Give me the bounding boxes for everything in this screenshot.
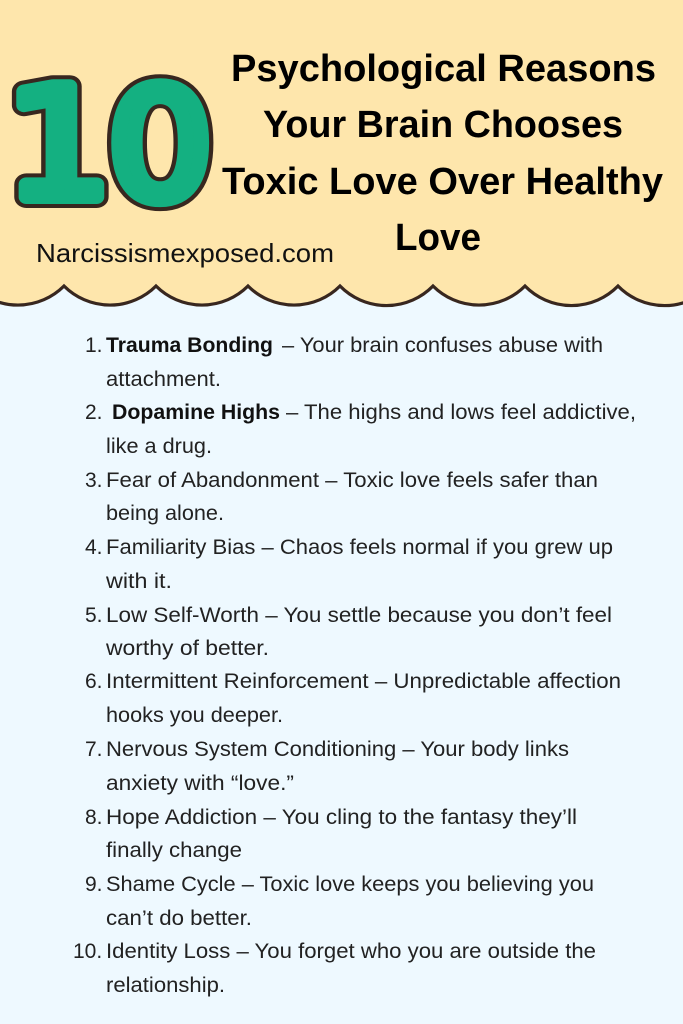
item 6: intermittent reinforcement: hooks you deeper. xyxy=(106,704,283,727)
item 5: low self-worth: worthy of better. xyxy=(105,637,269,660)
item 10: identity loss: Identity Loss – You forget who you are outside the xyxy=(106,940,596,963)
title: Your Brain Chooses xyxy=(263,104,623,146)
item 4: familiarity bias: 4. xyxy=(85,536,103,559)
item 1: trauma bonding: attachment. xyxy=(106,368,221,391)
title: Psychological Reasons xyxy=(231,48,656,90)
item 7: nervous system conditioning: anxiety with “love.” xyxy=(106,772,294,795)
item 5: low self-worth: Low Self-Worth – You settle because you don’t feel xyxy=(106,604,612,627)
item 9: shame cycle: 9. xyxy=(85,873,103,896)
item 8: hope addiction: Hope Addiction – You cling to the fantasy they’ll xyxy=(106,806,577,829)
header banner with scalloped edge xyxy=(0,0,683,306)
item 10: identity loss xyxy=(73,940,596,997)
title xyxy=(222,48,663,259)
item 9: shame cycle: can’t do better. xyxy=(106,907,252,930)
item 1: trauma bonding: 1. xyxy=(85,334,103,357)
big number 10: 0 xyxy=(108,58,212,235)
item 2: dopamine highs: Dopamine Highs xyxy=(112,401,280,424)
item 2: dopamine highs: like a drug. xyxy=(106,435,212,458)
website name: Narcissismexposed.com xyxy=(36,238,334,268)
item 5: low self-worth xyxy=(85,604,612,660)
big number 10: 1 xyxy=(6,56,112,233)
item 6: intermittent reinforcement xyxy=(85,670,621,727)
item 4: familiarity bias: with it. xyxy=(105,570,172,593)
item 5: low self-worth: 5. xyxy=(85,604,103,627)
item 3: fear of abandonment: 3. xyxy=(85,469,103,492)
item 2: dopamine highs xyxy=(85,401,636,458)
item 8: hope addiction: finally change xyxy=(106,839,242,862)
item 9: shame cycle xyxy=(85,873,594,930)
item 7: nervous system conditioning: 7. xyxy=(85,738,103,761)
item 4: familiarity bias: Familiarity Bias – Chaos feels normal if you grew up xyxy=(106,536,613,559)
item 8: hope addiction: 8. xyxy=(85,806,103,829)
item 3: fear of abandonment: being alone. xyxy=(106,502,224,525)
item 1: trauma bonding xyxy=(85,334,603,391)
item 6: intermittent reinforcement: Intermittent Reinforcement – Unpredictable affection xyxy=(106,670,621,693)
item 3: fear of abandonment xyxy=(85,469,598,525)
item 8: hope addiction xyxy=(85,806,577,862)
item 1: trauma bonding: – Your brain confuses abuse with xyxy=(282,334,603,357)
numbered list xyxy=(73,334,636,997)
title: Toxic Love Over Healthy xyxy=(222,161,663,203)
big number 10: 0 xyxy=(108,58,212,235)
item 7: nervous system conditioning xyxy=(85,738,569,795)
item 10: identity loss: 10. xyxy=(73,940,102,963)
big number 10: 1 xyxy=(6,56,112,233)
big number 10 xyxy=(6,56,212,235)
item 3: fear of abandonment: Fear of Abandonment – Toxic love feels safer than xyxy=(106,469,598,492)
item 7: nervous system conditioning: Nervous System Conditioning – Your body links xyxy=(106,738,569,761)
title: Love xyxy=(395,217,481,259)
item 9: shame cycle: Shame Cycle – Toxic love keeps you believing you xyxy=(106,873,594,896)
item 1: trauma bonding: Trauma Bonding xyxy=(106,334,273,357)
item 2: dopamine highs: – The highs and lows feel addictive, xyxy=(286,401,636,424)
item 2: dopamine highs: 2. xyxy=(85,401,103,424)
item 6: intermittent reinforcement: 6. xyxy=(85,670,103,693)
item 10: identity loss: relationship. xyxy=(106,974,225,997)
item 4: familiarity bias xyxy=(85,536,613,593)
